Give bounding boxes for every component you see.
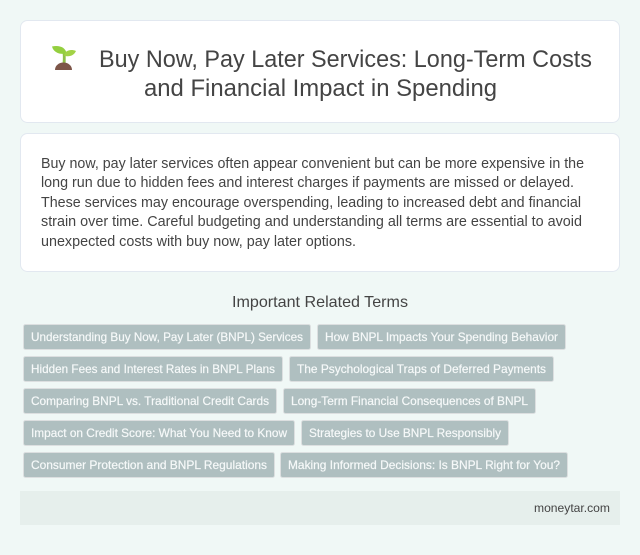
summary paragraph: unexpected costs with buy now, pay later options. <box>41 233 356 250</box>
tag <box>284 388 536 414</box>
footer source: moneytar.com <box>534 501 610 515</box>
summary paragraph: strain over time. Careful budgeting and understanding all terms are essential to avoid <box>41 213 582 230</box>
tag <box>24 324 310 350</box>
summary paragraph <box>41 155 584 250</box>
panel: title card <box>20 20 620 122</box>
tag <box>24 356 282 382</box>
tag: How BNPL Impacts Your Spending Behavior <box>325 330 558 344</box>
summary paragraph: Buy now, pay later services often appear convenient but can be more expensive in the <box>41 155 584 172</box>
tag: Making Informed Decisions: Is BNPL Right for You? <box>288 458 560 472</box>
tag: The Psychological Traps of Deferred Payments <box>297 362 546 376</box>
tag: Strategies to Use BNPL Responsibly <box>309 426 501 440</box>
summary paragraph: long run due to hidden fees and interest charges if payments are missed or delayed. <box>41 174 574 191</box>
tag <box>318 324 566 350</box>
tag: Consumer Protection and BNPL Regulations <box>31 458 267 472</box>
icon: seedling <box>52 46 76 70</box>
tag: Comparing BNPL vs. Traditional Credit Cards <box>31 394 269 408</box>
tag: Understanding Buy Now, Pay Later (BNPL) Services <box>31 330 303 344</box>
tag <box>24 388 276 414</box>
panel: summary card <box>20 134 620 272</box>
title text <box>99 46 592 102</box>
tag: Impact on Credit Score: What You Need to Know <box>31 426 287 440</box>
tag: Hidden Fees and Interest Rates in BNPL Plans <box>31 362 275 376</box>
tag <box>280 452 568 478</box>
tag <box>24 420 294 446</box>
heading: related terms: Important Related Terms <box>232 294 408 311</box>
title text: Buy Now, Pay Later Services: Long-Term Costs <box>99 46 592 73</box>
title text: and Financial Impact in Spending <box>144 75 497 102</box>
footer bar <box>20 491 620 525</box>
tag list <box>24 324 568 478</box>
tag <box>302 420 508 446</box>
tag: Long-Term Financial Consequences of BNPL <box>291 394 528 408</box>
tag <box>290 356 554 382</box>
tag <box>24 452 274 478</box>
summary paragraph: These services may encourage overspending, leading to increased debt and financial <box>41 194 581 211</box>
